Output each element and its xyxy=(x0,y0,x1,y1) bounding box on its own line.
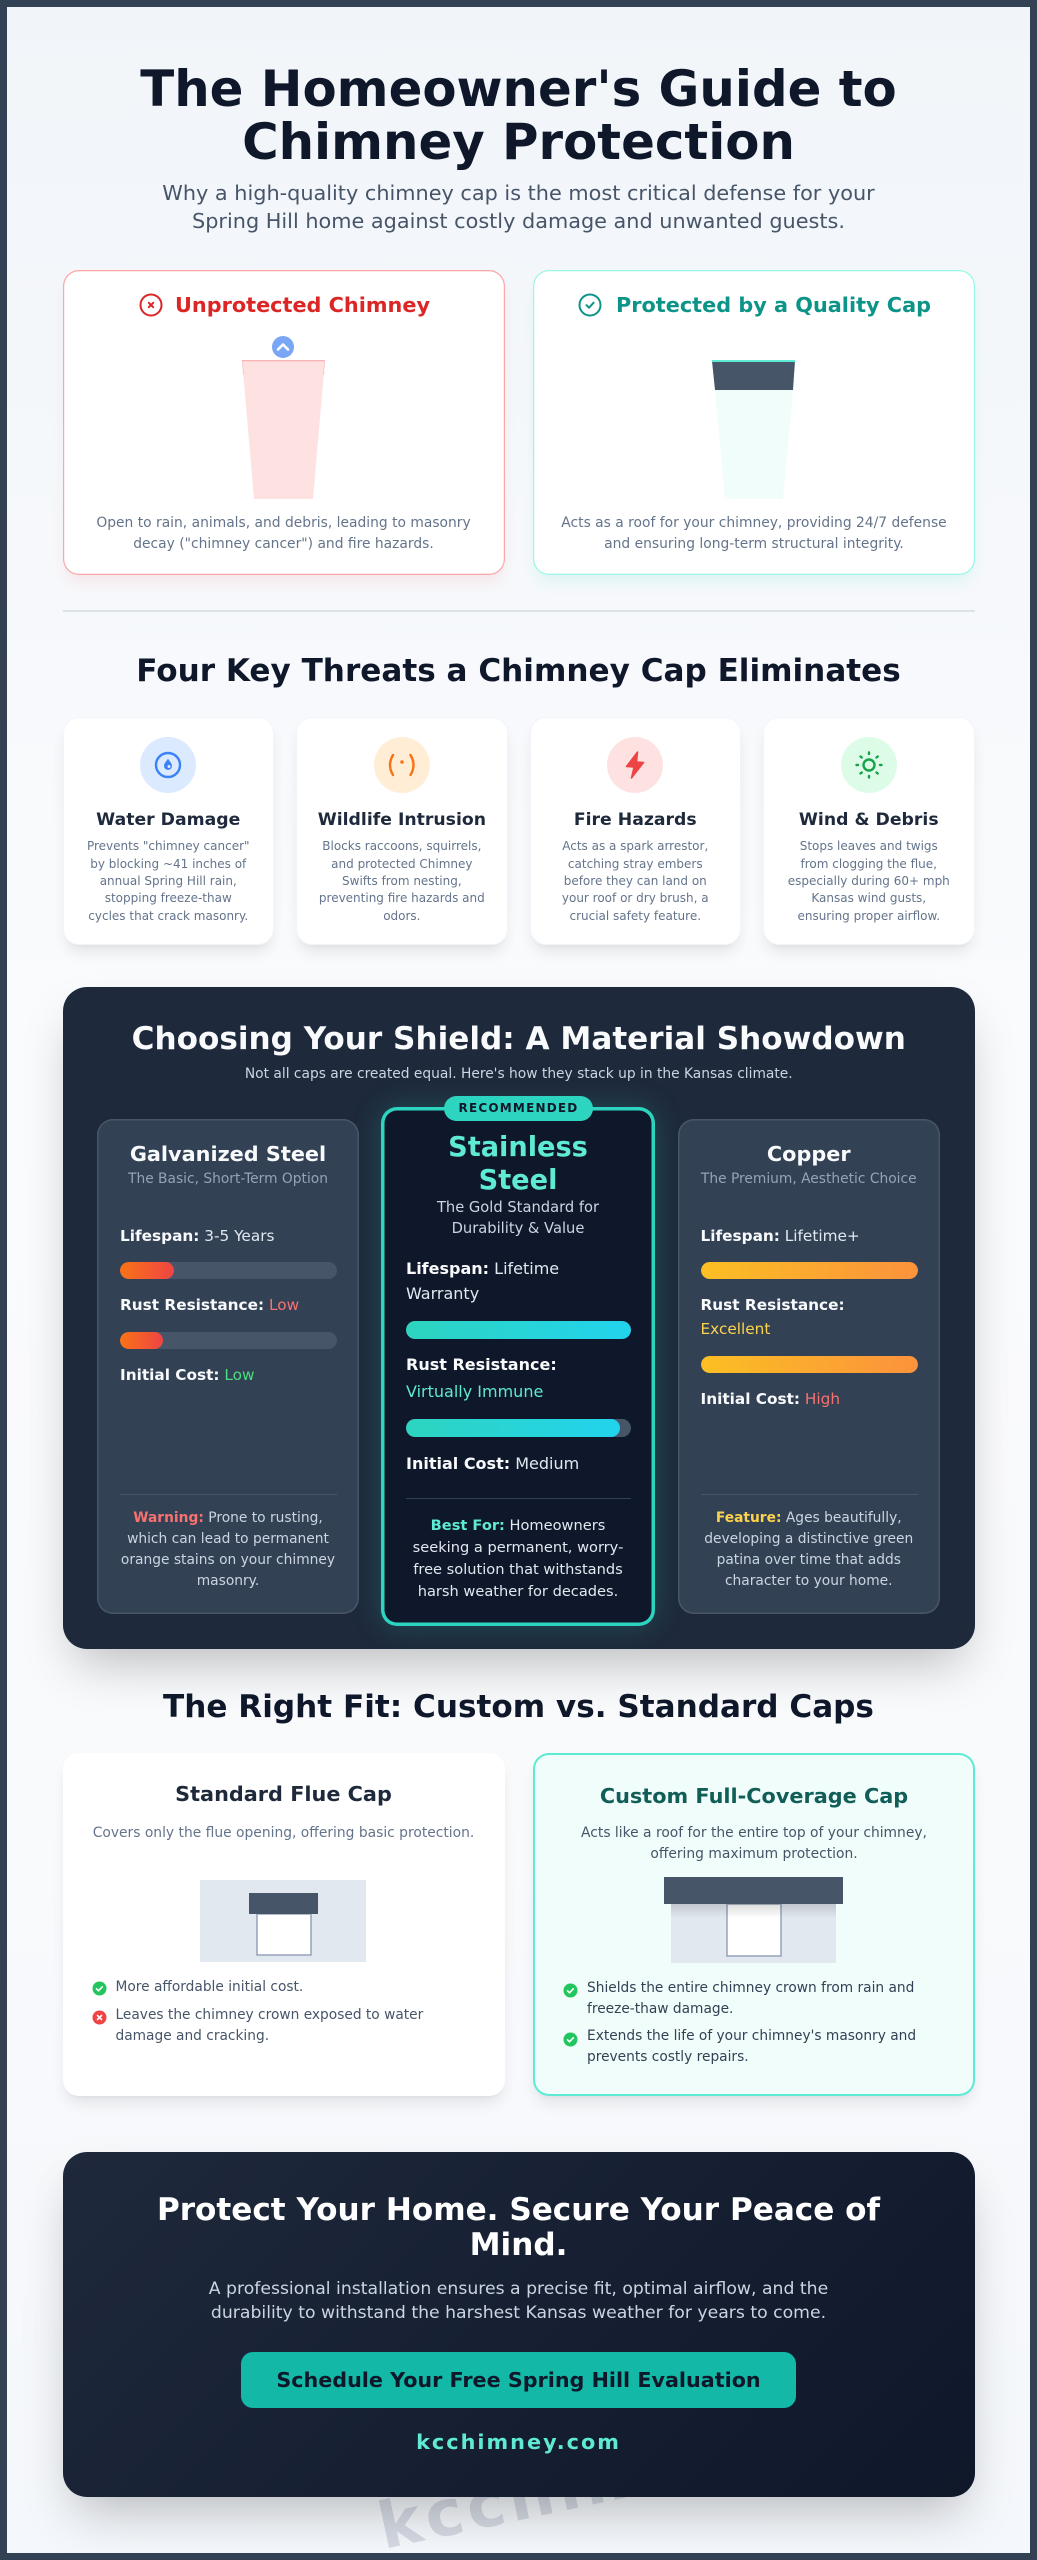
chimney illustration xyxy=(242,336,325,499)
recommended badge xyxy=(444,1096,593,1121)
description xyxy=(319,839,485,923)
tagline: Durability & Value xyxy=(452,1220,584,1237)
description xyxy=(562,839,709,923)
lifespan: Lifespan: 3-5 Years xyxy=(120,1227,274,1245)
best for note: harsh weather for decades. xyxy=(418,1583,618,1600)
benefit text: prevents costly repairs. xyxy=(587,2049,749,2065)
warning note: which can lead to permanent xyxy=(127,1530,329,1546)
description: Blocks raccoons, squirrels, xyxy=(322,839,481,853)
icon: check circle xyxy=(578,294,602,316)
rust resistance: Excellent xyxy=(700,1320,770,1338)
benefit text xyxy=(587,2028,916,2065)
list: benefits xyxy=(564,1980,916,2065)
initial cost: Initial Cost: High xyxy=(700,1390,840,1408)
description: Stops leaves and twigs xyxy=(800,839,938,853)
icon: water xyxy=(140,737,196,793)
heading: Choosing Your Shield: A Material Showdown xyxy=(132,1021,906,1057)
paragraph: A professional installation ensures a precise fit, optimal airflow, and the xyxy=(209,2279,828,2299)
title: Chimney Protection xyxy=(242,113,795,171)
title: Wind & Debris xyxy=(799,810,939,830)
capped chimney illustration xyxy=(712,360,795,499)
description: your roof or dry brush, a xyxy=(562,891,709,905)
card: fire hazards xyxy=(530,717,741,945)
subheading: Not all caps are created equal. Here's how they stack up in the Kansas climate. xyxy=(245,1066,793,1082)
panel: standard flue cap xyxy=(62,1753,504,2096)
name: Stainless xyxy=(448,1132,588,1162)
card: wind and debris xyxy=(763,717,974,945)
title: Custom Full-Coverage Cap xyxy=(600,1784,908,1808)
description: preventing fire hazards and xyxy=(319,891,485,905)
icon: check xyxy=(92,1982,106,1996)
rust bar xyxy=(700,1356,918,1373)
caption: and ensuring long-term structural integrity. xyxy=(604,536,904,552)
description: before they can land on xyxy=(564,874,707,888)
rust resistance xyxy=(406,1355,557,1400)
card: stainless steel xyxy=(381,1107,655,1626)
feature note: Feature: Ages beautifully, xyxy=(716,1510,902,1526)
title: The Homeowner's Guide to xyxy=(140,60,897,118)
benefit text: freeze-thaw damage. xyxy=(587,2001,733,2017)
paragraph xyxy=(62,2277,974,2325)
pro text: More affordable initial cost. xyxy=(116,1978,303,1994)
rust resistance: Rust Resistance: Low xyxy=(120,1296,299,1314)
subtitle: Spring Hill home against costly damage and unwanted guests. xyxy=(192,209,845,233)
heading: Unprotected Chimney xyxy=(175,293,430,317)
warning note: Warning: Prone to rusting, xyxy=(133,1510,323,1526)
name xyxy=(448,1132,588,1196)
subtitle: Why a high-quality chimney cap is the most critical defense for your xyxy=(162,181,875,205)
caption: Open to rain, animals, and debris, leading to masonry xyxy=(96,514,471,530)
rust bar xyxy=(406,1419,631,1437)
icon: fire bolt xyxy=(607,737,663,793)
panel: protected chimney xyxy=(533,270,975,575)
lifespan bar xyxy=(406,1320,631,1339)
caption xyxy=(561,514,947,552)
description: Acts like a roof for the entire top of your chimney, xyxy=(581,1825,927,1841)
title: Wildlife Intrusion xyxy=(318,810,486,830)
rust resistance xyxy=(700,1296,845,1338)
title: Standard Flue Cap xyxy=(175,1782,392,1806)
button: Schedule Your Free Spring Hill Evaluation xyxy=(276,2368,761,2392)
title xyxy=(140,60,897,171)
caption xyxy=(96,514,471,552)
icon: wildlife xyxy=(374,737,430,793)
icon: x circle xyxy=(140,294,162,316)
tagline: The Gold Standard for xyxy=(437,1199,599,1216)
description xyxy=(788,839,950,923)
custom cap illustration xyxy=(664,1877,843,1963)
description: offering maximum protection. xyxy=(650,1846,858,1862)
card: copper xyxy=(678,1119,940,1614)
lifespan: Lifespan: Lifetime+ xyxy=(700,1227,860,1245)
lifespan bar xyxy=(120,1262,337,1279)
description: and protected Chimney xyxy=(331,857,472,871)
list: pros and cons xyxy=(92,1978,424,2044)
paragraph: durability to withstand the harshest Kansas weather for years to come. xyxy=(211,2303,826,2323)
description: ensuring proper airflow. xyxy=(797,909,940,923)
feature note: character to your home. xyxy=(725,1572,893,1588)
best for note: free solution that withstands xyxy=(413,1561,623,1578)
subtitle xyxy=(162,181,875,233)
benefit text: Shields the entire chimney crown from rain and xyxy=(587,1980,914,1996)
recommended badge: RECOMMENDED xyxy=(459,1100,578,1114)
warning note: masonry. xyxy=(197,1572,259,1588)
feature note: patina over time that adds xyxy=(717,1552,901,1568)
tagline xyxy=(436,1199,600,1237)
rust resistance: Rust Resistance: xyxy=(700,1296,845,1314)
panel: call to action xyxy=(62,2152,974,2497)
watermark: kcchimney.com xyxy=(372,2366,983,2560)
card: wildlife intrusion xyxy=(296,717,508,945)
initial cost: Initial Cost: Low xyxy=(120,1366,255,1384)
description: Acts as a spark arrestor, xyxy=(562,839,708,853)
description: odors. xyxy=(383,909,420,923)
rust resistance: Virtually Immune xyxy=(406,1382,543,1400)
name: Steel xyxy=(479,1164,557,1196)
caption: Acts as a roof for your chimney, providing 24/7 defense xyxy=(561,514,947,530)
panel: custom full-coverage cap xyxy=(533,1753,975,2096)
lifespan xyxy=(406,1258,559,1303)
lifespan: Lifespan: Lifetime xyxy=(406,1258,559,1278)
rust resistance: Rust Resistance: xyxy=(406,1355,557,1374)
icon: cross xyxy=(92,2010,106,2024)
initial cost: Initial Cost: Medium xyxy=(406,1454,579,1473)
description: Kansas wind gusts, xyxy=(811,891,926,905)
icon: check xyxy=(564,2032,578,2046)
feature note: developing a distinctive green xyxy=(704,1530,913,1546)
feature note xyxy=(704,1510,913,1588)
website: kcchimney.com xyxy=(416,2430,621,2454)
heading: four key threats: Four Key Threats a Chimney Cap Eliminates xyxy=(136,653,901,689)
warning note: orange stains on your chimney xyxy=(121,1552,335,1568)
con text xyxy=(116,2006,424,2044)
description: from clogging the flue, xyxy=(800,857,937,871)
description: Covers only the flue opening, offering basic protection. xyxy=(93,1824,474,1840)
con text: Leaves the chimney crown exposed to water xyxy=(116,2006,423,2022)
description: crucial safety feature. xyxy=(569,909,701,923)
rust bar xyxy=(120,1332,337,1349)
description: stopping freeze-thaw xyxy=(105,891,232,905)
title: Fire Hazards xyxy=(574,810,697,830)
button xyxy=(241,2352,796,2408)
name: Copper xyxy=(767,1142,851,1166)
best for note: Best For: Homeowners xyxy=(431,1516,605,1534)
heading xyxy=(157,2192,880,2262)
card: water damage xyxy=(62,717,274,945)
heading: Protect Your Home. Secure Your Peace of xyxy=(157,2192,880,2228)
description: Swifts from nesting, xyxy=(342,874,462,888)
icon: check xyxy=(564,1984,578,1998)
tagline: The Premium, Aesthetic Choice xyxy=(701,1170,917,1186)
card: galvanized steel xyxy=(97,1119,359,1614)
description xyxy=(87,839,250,923)
divider xyxy=(62,610,975,612)
description: Prevents "chimney cancer" xyxy=(87,839,250,853)
heading: Mind. xyxy=(470,2226,567,2262)
caption: decay ("chimney cancer") and fire hazards. xyxy=(133,536,434,552)
benefit text: Extends the life of your chimney's masonry and xyxy=(587,2028,916,2044)
warning note xyxy=(121,1510,335,1588)
lifespan: Warranty xyxy=(406,1284,479,1303)
name: Galvanized Steel xyxy=(130,1142,326,1166)
best for note: seeking a permanent, worry- xyxy=(413,1539,623,1556)
description xyxy=(581,1825,927,1862)
benefit text xyxy=(587,1980,914,2017)
description: catching stray embers xyxy=(568,857,703,871)
description: cycles that crack masonry. xyxy=(88,909,248,923)
con text: damage and cracking. xyxy=(116,2028,269,2044)
panel: unprotected chimney xyxy=(62,270,504,575)
title: Water Damage xyxy=(96,810,240,830)
description: annual Spring Hill rain, xyxy=(100,874,237,888)
best for note xyxy=(413,1516,623,1600)
header xyxy=(140,60,897,233)
standard cap illustration xyxy=(200,1880,366,1962)
tagline: The Basic, Short-Term Option xyxy=(128,1170,328,1186)
lifespan bar xyxy=(700,1262,918,1279)
heading: right fit: The Right Fit: Custom vs. Standard Caps xyxy=(163,1689,874,1725)
description: especially during 60+ mph xyxy=(788,874,950,888)
heading: Protected by a Quality Cap xyxy=(616,293,931,317)
description: by blocking ~41 inches of xyxy=(90,857,246,871)
icon: wind xyxy=(840,737,896,793)
panel: material showdown xyxy=(62,987,975,1649)
